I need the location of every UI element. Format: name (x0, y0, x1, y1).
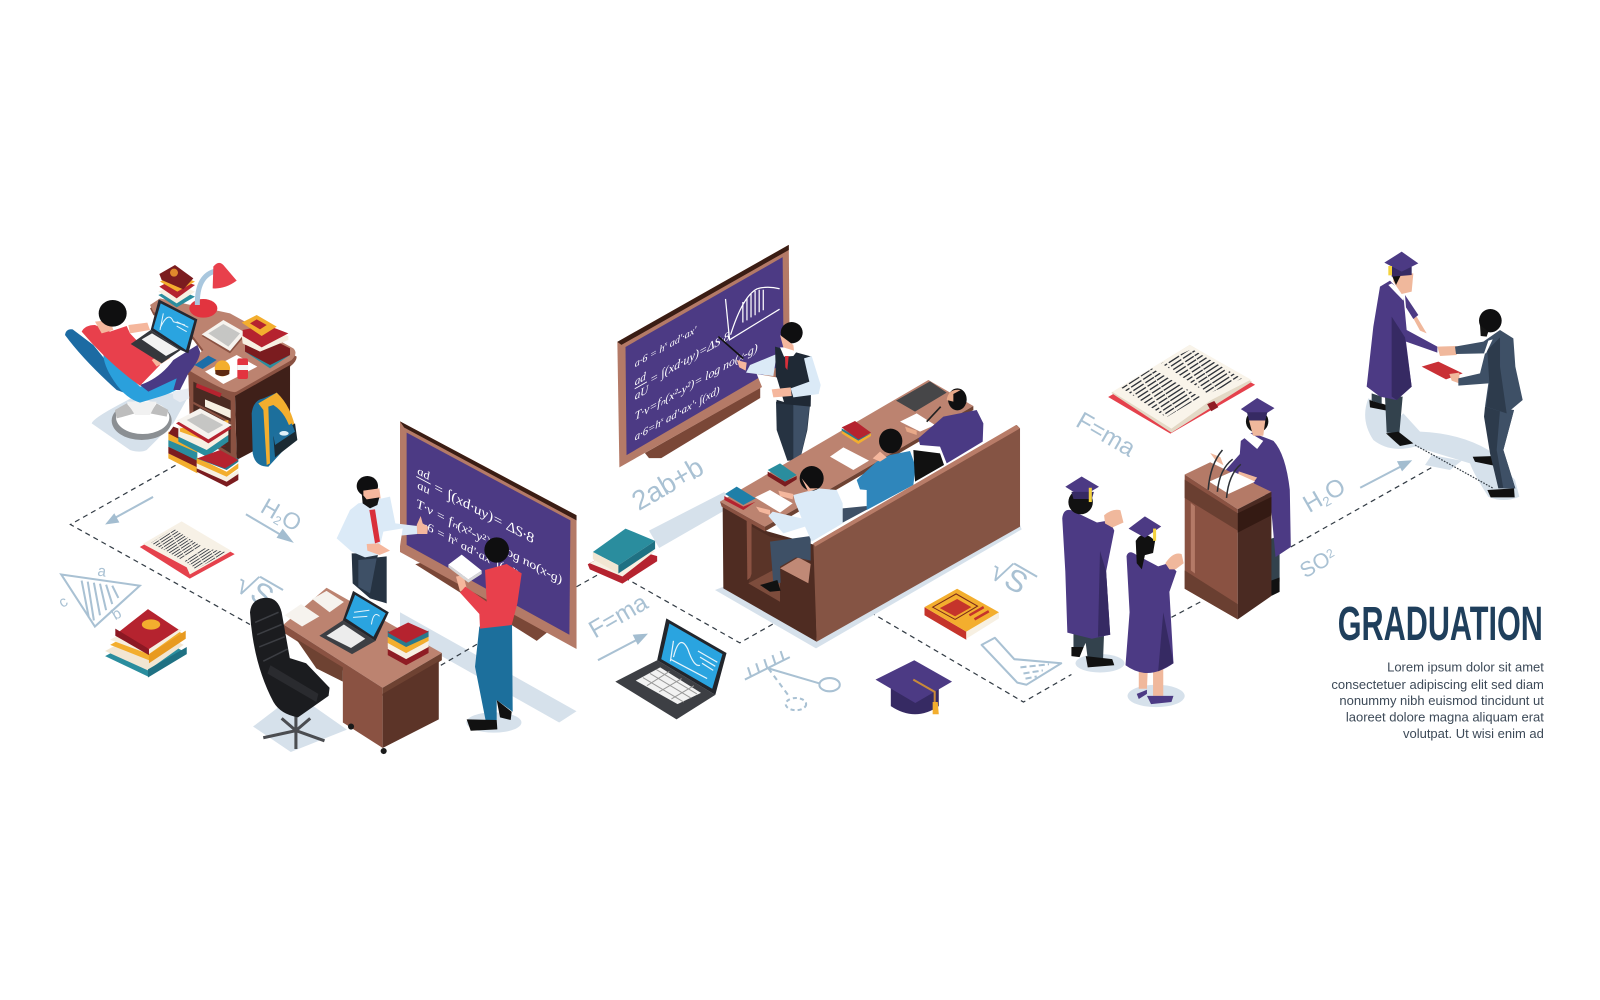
formulas on chalkboard 1 (416, 462, 562, 606)
book stack back (158, 265, 195, 307)
formulas on chalkboard 2: a·6=h (635, 418, 661, 444)
description text (1331, 659, 1544, 741)
formulas on chalkboard 2: ad'·ax' (667, 324, 697, 352)
line icon: triangle: a (96, 563, 108, 581)
student at board (448, 537, 522, 731)
chalkboard 2 (617, 245, 790, 467)
formulas on chalkboard 2: ad (635, 369, 647, 389)
books on desk (388, 622, 429, 665)
desk pedestal (188, 365, 290, 461)
desk items (194, 355, 257, 384)
laptop large (615, 618, 727, 719)
formulas on chalkboard 2: x (664, 340, 667, 349)
formulas on chalkboard 1: au (417, 477, 430, 498)
student (82, 300, 170, 386)
laptop on desk (319, 591, 389, 654)
formula root S left: √S (230, 566, 279, 614)
dashes on shadow (1415, 445, 1493, 488)
student legs (140, 345, 200, 402)
student three (905, 388, 983, 482)
office chair (250, 598, 330, 749)
formulas on chalkboard 2: T·v=fₙ(x²-y²)= log no(x-g) (635, 341, 758, 423)
graduate (1367, 252, 1437, 446)
head (357, 476, 381, 508)
desk items (724, 381, 947, 513)
panel: student at home desk (65, 263, 297, 487)
formula SO2: 2 (1324, 546, 1337, 561)
handshake shadow (1365, 398, 1519, 500)
arrow and formula F=ma: F=ma (584, 589, 653, 644)
formula H2O with arrow: 2 (271, 513, 284, 528)
formulas on chalkboard 1: x (453, 532, 458, 544)
formula H2O right with arrow (1299, 460, 1412, 519)
speaker (1210, 398, 1291, 596)
desk top (150, 298, 297, 397)
trousers (467, 623, 513, 731)
formulas on chalkboard 1: T·v = fₙ(x²-y²)= log no(x-g) (416, 496, 562, 588)
line icon: triangle: c (56, 593, 71, 612)
shirt (448, 537, 522, 629)
description text: Lorem ipsum dolor sit amet (1387, 659, 1544, 674)
formula F=ma top: F=ma (1071, 407, 1140, 463)
bearded man (1422, 309, 1523, 497)
panel: teacher desk with board (250, 421, 577, 754)
description text: consectetuer adipiscing elit sed diam (1331, 677, 1544, 692)
podium (1185, 450, 1271, 619)
shirt (337, 497, 428, 557)
formulas on chalkboard 2 (635, 289, 758, 444)
panel: speaker at podium (1185, 398, 1291, 619)
line icon: triangle: b (109, 605, 125, 624)
formula H2O with arrow: H (257, 493, 284, 524)
formulas on chalkboard 2: = ∫(xd·uy)=ΔS·8 (650, 328, 730, 388)
formulas on chalkboard 1: = ∫(xd·uy)= ΔS·8 (434, 479, 534, 548)
bench back panel (813, 425, 1020, 642)
backpack (252, 393, 297, 467)
books right on desk (242, 315, 290, 368)
teacher with glasses (337, 476, 428, 603)
description text: nonummy nibh euismod tincidunt ut (1339, 693, 1544, 708)
lecturer (718, 322, 821, 461)
laptop (131, 299, 197, 363)
graph on chalkboard 2 (726, 287, 780, 340)
formulas on chalkboard 2: a·6 = h (635, 342, 664, 370)
chalkboard 1 (400, 421, 577, 649)
formula SO2: SO (1296, 547, 1334, 583)
formulas on chalkboard 2: x (660, 416, 663, 424)
formula 2ab+b: 2ab+b (626, 451, 709, 516)
line icon: flask (982, 638, 1061, 685)
panel: lecturer with board and bench (617, 245, 1022, 648)
graduate female (1126, 516, 1184, 704)
bench shadow (715, 525, 1022, 648)
formula H2O with arrow (246, 493, 306, 543)
open book large (1108, 345, 1255, 434)
formula H2O right with arrow: H (1299, 486, 1327, 518)
chair shell (65, 329, 184, 403)
arrow left (105, 497, 153, 524)
panel: handshake (1365, 252, 1523, 500)
formula root S right: √S (984, 553, 1033, 601)
formulas on chalkboard 1: ad'·ax' ∫(xd) (458, 535, 519, 583)
formulas on chalkboard 1: ad (417, 463, 430, 484)
floor shadows (253, 492, 1185, 752)
chair shadow (92, 393, 190, 452)
graduation cap icon (876, 660, 952, 714)
graduate male (1062, 477, 1123, 667)
book pile floor (168, 408, 238, 487)
formula H2O right with arrow: O (1320, 473, 1350, 506)
student two (843, 429, 916, 523)
open book small (140, 521, 235, 579)
lamp (189, 263, 237, 318)
teacher desk (284, 588, 442, 754)
bench left side (723, 507, 817, 642)
student one (756, 466, 843, 592)
bench (715, 380, 1022, 648)
trousers (352, 553, 387, 603)
open notebook (202, 320, 245, 353)
line icon: pendulum (745, 651, 840, 710)
formula H2O right with arrow: 2 (1320, 493, 1334, 510)
formula H2O with arrow: O (277, 505, 306, 537)
description text: laoreet dolore magna aliquam erat (1346, 709, 1544, 724)
panel: applauding graduates (1062, 477, 1184, 704)
description text: volutpat. Ut wisi enim ad (1403, 726, 1544, 741)
formulas on chalkboard 2: aU (635, 381, 650, 403)
line icon: triangle (56, 563, 140, 627)
formulas on chalkboard 2: ad'·ax'· ∫(xd) (663, 384, 720, 427)
book stack left (105, 609, 187, 678)
formulas on chalkboard 1: ·6 = h (424, 518, 454, 547)
dashed connector path (70, 461, 1443, 702)
chair base (112, 401, 172, 440)
bench desk top (720, 380, 973, 531)
book stack center (588, 529, 657, 584)
orange book (924, 589, 999, 640)
